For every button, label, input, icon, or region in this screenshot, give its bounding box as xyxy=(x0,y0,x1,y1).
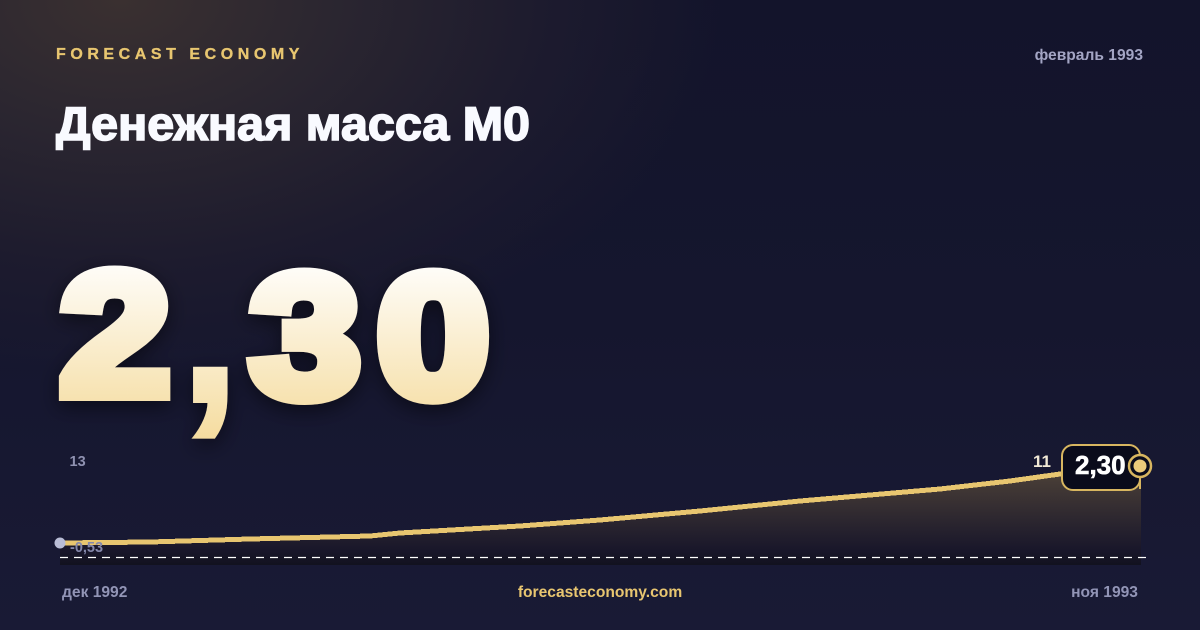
brand label: FORECAST ECONOMY xyxy=(56,46,304,63)
peak label: 11 xyxy=(1033,452,1051,471)
chart area fill xyxy=(60,470,1141,565)
value badge xyxy=(1062,445,1151,490)
end date label: ноя 1993 xyxy=(1071,584,1138,601)
website: forecasteconomy.com xyxy=(518,584,682,601)
big value: 0 xyxy=(377,238,489,433)
big value: , xyxy=(178,194,242,451)
big value: 2 xyxy=(60,236,170,431)
big value: 3 xyxy=(250,238,360,433)
axis max label: 13 xyxy=(70,454,86,470)
axis min label: -0,53 xyxy=(70,540,103,556)
date label: февраль 1993 xyxy=(1035,47,1143,64)
value badge: 2,30 xyxy=(1075,450,1126,480)
chart line xyxy=(60,472,1090,543)
zero baseline xyxy=(60,556,1146,558)
start date label: дек 1992 xyxy=(62,584,128,601)
big value xyxy=(60,194,489,451)
start marker xyxy=(54,538,66,548)
title: Денежная масса M0 xyxy=(56,97,530,150)
chart xyxy=(54,445,1151,565)
end marker xyxy=(1129,455,1151,489)
